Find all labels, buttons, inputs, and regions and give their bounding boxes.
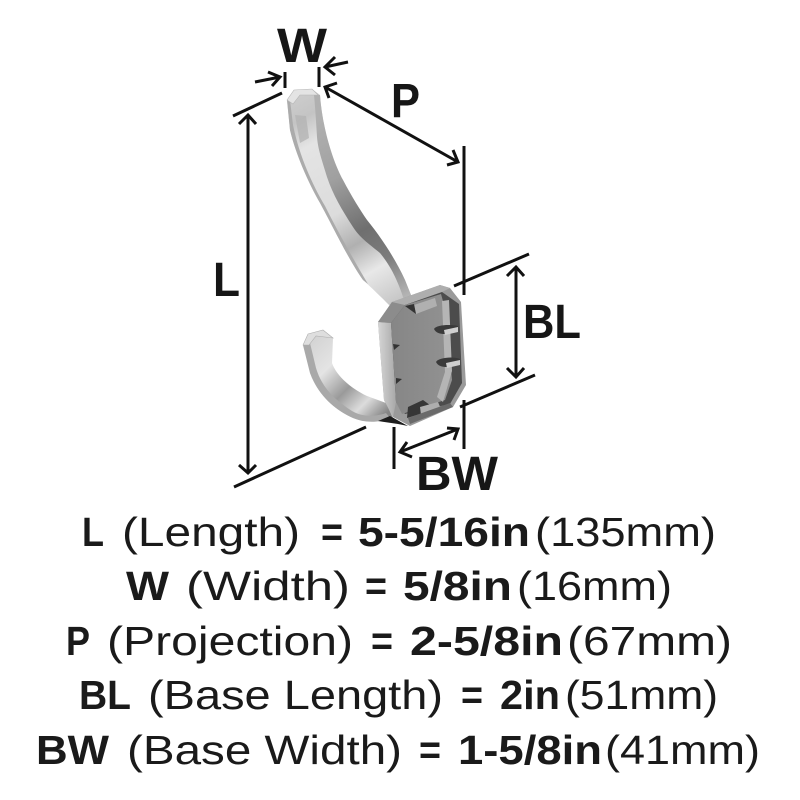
spec line: base width: (41mm) <box>605 727 760 773</box>
spec line: base length: = <box>461 672 483 718</box>
spec line: projection <box>66 618 732 664</box>
spec line: projection: (Projection) <box>107 618 353 664</box>
pegs <box>434 325 458 334</box>
spec line: base length: (Base Length) <box>148 672 443 718</box>
dark inner wall <box>391 292 462 414</box>
upper arm <box>287 89 413 308</box>
label: L: L <box>213 254 240 307</box>
spec line: projection: = <box>371 618 393 664</box>
base outer shell <box>378 285 466 426</box>
bottom tab <box>407 400 434 418</box>
spec line: width: 5/8in <box>403 563 512 609</box>
spec line: length: 5-5/16in <box>358 509 530 555</box>
dimension lines and arrows <box>233 57 535 487</box>
spec line: projection: 2-5/8in <box>410 618 563 664</box>
spec line: length: (Length) <box>122 509 300 555</box>
spec line: length: = <box>321 509 343 555</box>
spec line: base width: = <box>419 727 441 773</box>
spec line: base width: (Base Width) <box>127 727 402 773</box>
BL dimension arrow <box>454 254 535 407</box>
spec line: base width: BW <box>36 727 109 773</box>
spec line: width: W <box>126 563 169 609</box>
top tab <box>414 298 437 314</box>
L dimension arrow <box>233 93 366 487</box>
small triangles <box>393 344 400 350</box>
spec line: base length <box>79 672 718 718</box>
right rail <box>437 300 452 402</box>
label: P: P <box>391 75 420 128</box>
spec line: base length: 2in <box>500 672 560 718</box>
spec line: base length: (51mm) <box>565 672 718 718</box>
base floor <box>391 294 452 414</box>
lower hook <box>303 330 408 426</box>
label: BL: BL <box>523 296 581 349</box>
spec line: base width <box>36 727 760 773</box>
base side face <box>378 322 396 417</box>
spec line: width: = <box>365 563 387 609</box>
spec line: base length: BL <box>79 672 131 718</box>
spec line: projection: (67mm) <box>567 618 732 664</box>
hook illustration <box>287 89 466 426</box>
spec line: width: (16mm) <box>517 563 672 609</box>
W dimension arrows <box>255 57 348 88</box>
spec line: projection: P <box>66 618 90 664</box>
spec line: width <box>126 563 672 609</box>
mounting base <box>378 285 466 426</box>
spec line: length: L <box>82 509 104 555</box>
spec line: base width: 1-5/8in <box>458 727 602 773</box>
P dimension arrow <box>325 83 464 295</box>
label: W: W <box>277 20 328 73</box>
BW dimension arrow <box>394 400 464 469</box>
spec line: length: (135mm) <box>535 509 716 555</box>
label: BW: BW <box>416 448 499 501</box>
spec line: length <box>82 509 716 555</box>
spec line: width: (Width) <box>186 563 350 609</box>
